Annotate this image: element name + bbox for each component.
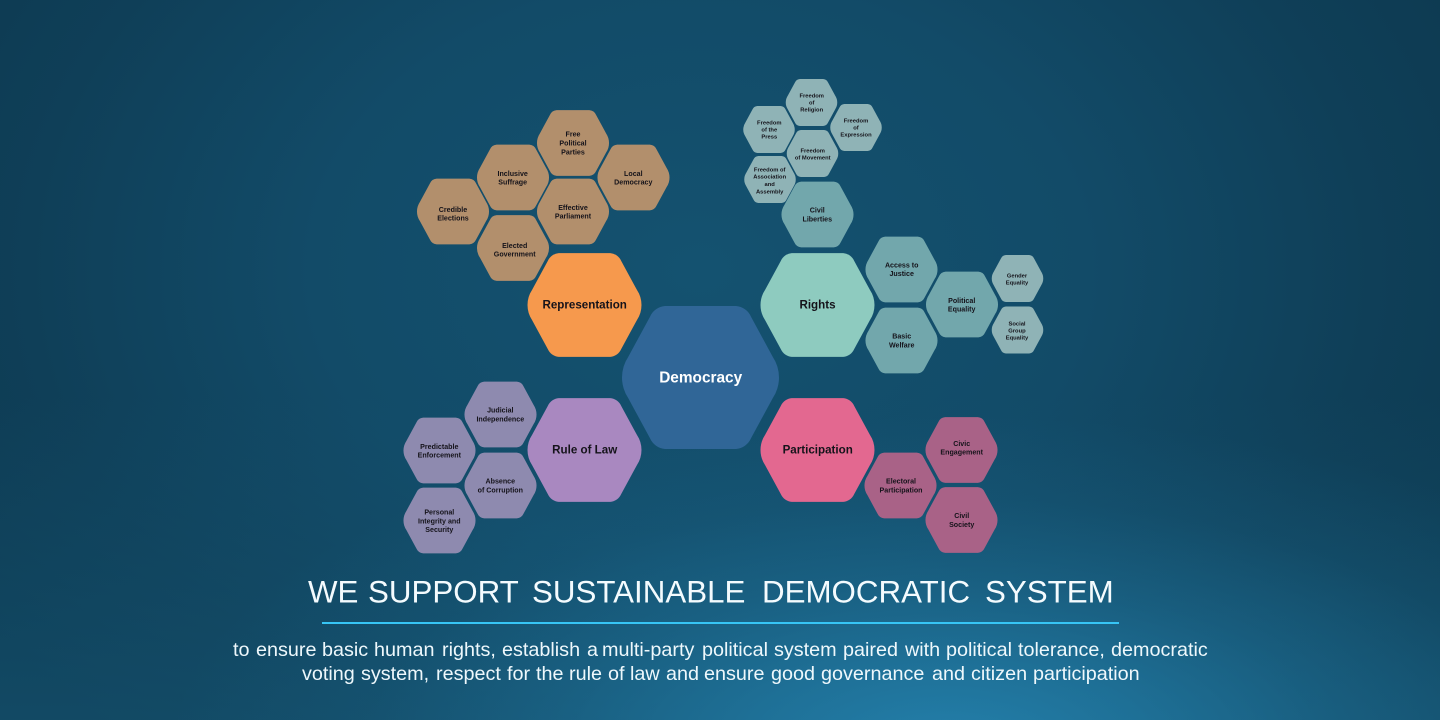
description text: good <box>771 663 821 685</box>
hexagon: Elected Government: Government <box>494 251 536 259</box>
hexagon: Rights: Rights <box>799 299 836 312</box>
description text: governance <box>821 663 930 685</box>
title: SYSTEM <box>985 574 1114 610</box>
hexagon: Free Political Parties: Parties <box>561 148 585 156</box>
hexagon: Representation <box>528 253 641 357</box>
description text: a <box>587 639 604 661</box>
description text: citizen <box>971 663 1033 685</box>
hexagon: Basic Welfare: Basic <box>892 332 911 340</box>
hexagon: Freedom of Movement: of Movement <box>795 155 831 161</box>
hexagon: Predictable Enforcement: Enforcement <box>418 452 462 460</box>
hexagon: Political Equality: Political <box>948 297 975 305</box>
hexagon: Inclusive Suffrage: Inclusive <box>498 170 528 178</box>
hexagon: Freedom of Expression: of <box>853 126 859 132</box>
hexagon: Gender Equality: Equality <box>1006 280 1029 286</box>
description text: and <box>666 663 705 685</box>
hexagon: Social Group Equality: Equality <box>1006 336 1029 342</box>
hexagon: Civil Society: Civil <box>954 512 969 520</box>
hexagon: Elected Government <box>477 215 549 281</box>
title: WE <box>308 574 367 610</box>
hexagon: Participation: Participation <box>783 444 853 457</box>
hexagon: Free Political Parties: Free <box>566 131 581 139</box>
hexagon: Democracy <box>622 306 779 449</box>
description text: participation <box>1033 663 1140 685</box>
title: DEMOCRATIC <box>762 574 979 610</box>
hexagon: Absence of Corruption: Absence <box>486 478 515 486</box>
hexagon: Political Equality <box>926 272 998 337</box>
hexagon: Rule of Law: Rule of Law <box>552 444 618 457</box>
description text: respect <box>436 663 506 685</box>
hexagon: Gender Equality <box>992 255 1043 302</box>
hexagon: Freedom of Association and Assembly <box>744 156 796 203</box>
description text: political <box>946 639 1017 661</box>
hexagon: Freedom of Association and Assembly: Freedom of <box>754 167 786 173</box>
hexagon: Rights <box>761 253 874 357</box>
hexagon: Judicial Independence: Judicial <box>487 407 514 415</box>
hexagon: Free Political Parties <box>537 110 609 176</box>
hexagon: Civil Society: Society <box>949 521 974 529</box>
hexagon: Absence of Corruption: of Corruption <box>478 486 523 494</box>
description text: basic <box>322 639 374 661</box>
hexagon: Predictable Enforcement <box>403 418 476 483</box>
description text: paired <box>843 639 903 661</box>
hexagon: Representation: Representation <box>542 299 627 312</box>
hexagon: Electoral Participation <box>864 453 937 518</box>
description text: of <box>608 663 630 685</box>
divider line under title <box>322 622 1119 624</box>
hexagon: Effective Parliament: Effective <box>558 204 588 212</box>
hexagon: Political Equality: Equality <box>948 306 976 314</box>
description text: tolerance, <box>1018 639 1110 661</box>
hexagon: Elected Government: Elected <box>502 242 527 250</box>
hexagon: Freedom of Expression: Freedom <box>844 118 868 124</box>
hexagon: Freedom of Association and Assembly: and <box>765 182 775 188</box>
description text: law <box>630 663 665 685</box>
hexagon: Freedom of Association and Assembly: Assembly <box>756 189 784 195</box>
hexagon: Freedom of Religion <box>786 79 837 126</box>
description text: voting <box>302 663 360 685</box>
hexagon: Democracy: Democracy <box>659 370 743 387</box>
hexagon: Credible Elections: Elections <box>437 215 469 223</box>
hexagon: Effective Parliament: Parliament <box>555 213 592 221</box>
hexagon: Basic Welfare: Welfare <box>889 341 915 349</box>
hexagon: Local Democracy: Democracy <box>614 179 652 187</box>
hexagon: Electoral Participation: Electoral <box>886 478 916 486</box>
hexagon: Inclusive Suffrage <box>477 145 549 210</box>
description text: human <box>374 639 440 661</box>
hexagon: Personal Integrity and Security <box>403 488 476 553</box>
hexagon: Civic Engagement: Civic <box>953 440 970 448</box>
cluster: Participation <box>761 398 998 553</box>
hexagon: Effective Parliament <box>537 179 609 244</box>
hexagon: Social Group Equality: Group <box>1008 328 1026 334</box>
hexagon: Access to Justice: Justice <box>889 270 914 278</box>
hexagon: Social Group Equality <box>992 307 1043 353</box>
title: SUPPORT <box>368 574 527 610</box>
cluster: Rule of Law <box>403 382 641 553</box>
cluster: Rights <box>743 79 1043 373</box>
hexagon: Civil Liberties: Civil <box>810 207 825 215</box>
hexagon: Participation <box>761 398 874 502</box>
hexagon: Basic Welfare <box>865 308 938 373</box>
hexagon: Personal Integrity and Security: Integrity and <box>418 517 461 525</box>
description text: multi-party <box>602 639 700 661</box>
description text: with <box>904 639 946 661</box>
hexagon: Civic Engagement: Engagement <box>940 449 984 457</box>
hexagon: Freedom of the Press <box>743 106 795 153</box>
hexagon: Freedom of Expression: Expression <box>840 133 872 139</box>
hexagon: Freedom of Movement <box>787 130 838 177</box>
description text: democratic <box>1111 639 1208 661</box>
description text: system, <box>361 663 435 685</box>
hexagon: Access to Justice <box>865 237 938 302</box>
hexagon: Credible Elections: Credible <box>439 206 467 214</box>
hexagon: Freedom of the Press: Press <box>761 135 777 141</box>
hexagon: Access to Justice: Access to <box>885 261 919 269</box>
description text: the <box>536 663 569 685</box>
description text: rule <box>569 663 607 685</box>
hexagon: Civil Society <box>925 487 998 553</box>
hexagon: Freedom of the Press: of the <box>761 128 778 134</box>
description text: establish <box>502 639 586 661</box>
description text <box>233 639 1208 685</box>
hexagon: Free Political Parties: Political <box>559 139 587 147</box>
hexagon: Social Group Equality: Social <box>1008 321 1026 327</box>
hexagon: Absence of Corruption <box>464 453 537 518</box>
description text: for <box>507 663 536 685</box>
hexagon: Personal Integrity and Security: Security <box>425 526 453 534</box>
description text: ensure <box>256 639 322 661</box>
hexagon: Freedom of Association and Assembly: Association <box>753 175 787 181</box>
hexagon: Judicial Independence: Independence <box>476 416 524 424</box>
title: SUSTAINABLE <box>532 574 754 610</box>
hexagon: Freedom of Religion: Religion <box>800 108 824 114</box>
cluster: Representation <box>417 110 670 357</box>
description text: to <box>233 639 255 661</box>
hexagon: Electoral Participation: Participation <box>880 486 922 494</box>
hexagon: Judicial Independence <box>464 382 537 447</box>
hexagon: Credible Elections <box>417 179 489 244</box>
hexagon: Local Democracy <box>597 145 670 210</box>
hexagon: Local Democracy: Local <box>624 170 643 178</box>
hexagon: Gender Equality: Gender <box>1007 273 1028 279</box>
description text: system <box>774 639 842 661</box>
hexagon: Predictable Enforcement: Predictable <box>420 443 458 451</box>
hexagon: Freedom of Movement: Freedom <box>800 148 825 154</box>
description text: ensure <box>704 663 770 685</box>
hexagon: Freedom of the Press: Freedom <box>757 120 782 126</box>
description text: rights, <box>442 639 501 661</box>
description text: political <box>702 639 773 661</box>
hexagon: Freedom of Religion: of <box>809 101 814 107</box>
description text: and <box>932 663 971 685</box>
hexagon: Inclusive Suffrage: Suffrage <box>498 179 527 187</box>
hexagon: Freedom of Expression <box>830 104 882 151</box>
hexagon: Civil Liberties <box>781 182 854 247</box>
hexagon: Civil Liberties: Liberties <box>803 215 832 223</box>
hexagon: Civic Engagement <box>925 417 998 483</box>
hexagon: Rule of Law <box>528 398 641 502</box>
hexagon: Freedom of Religion: Freedom <box>799 94 824 100</box>
hexagon: Personal Integrity and Security: Personal <box>424 509 454 517</box>
